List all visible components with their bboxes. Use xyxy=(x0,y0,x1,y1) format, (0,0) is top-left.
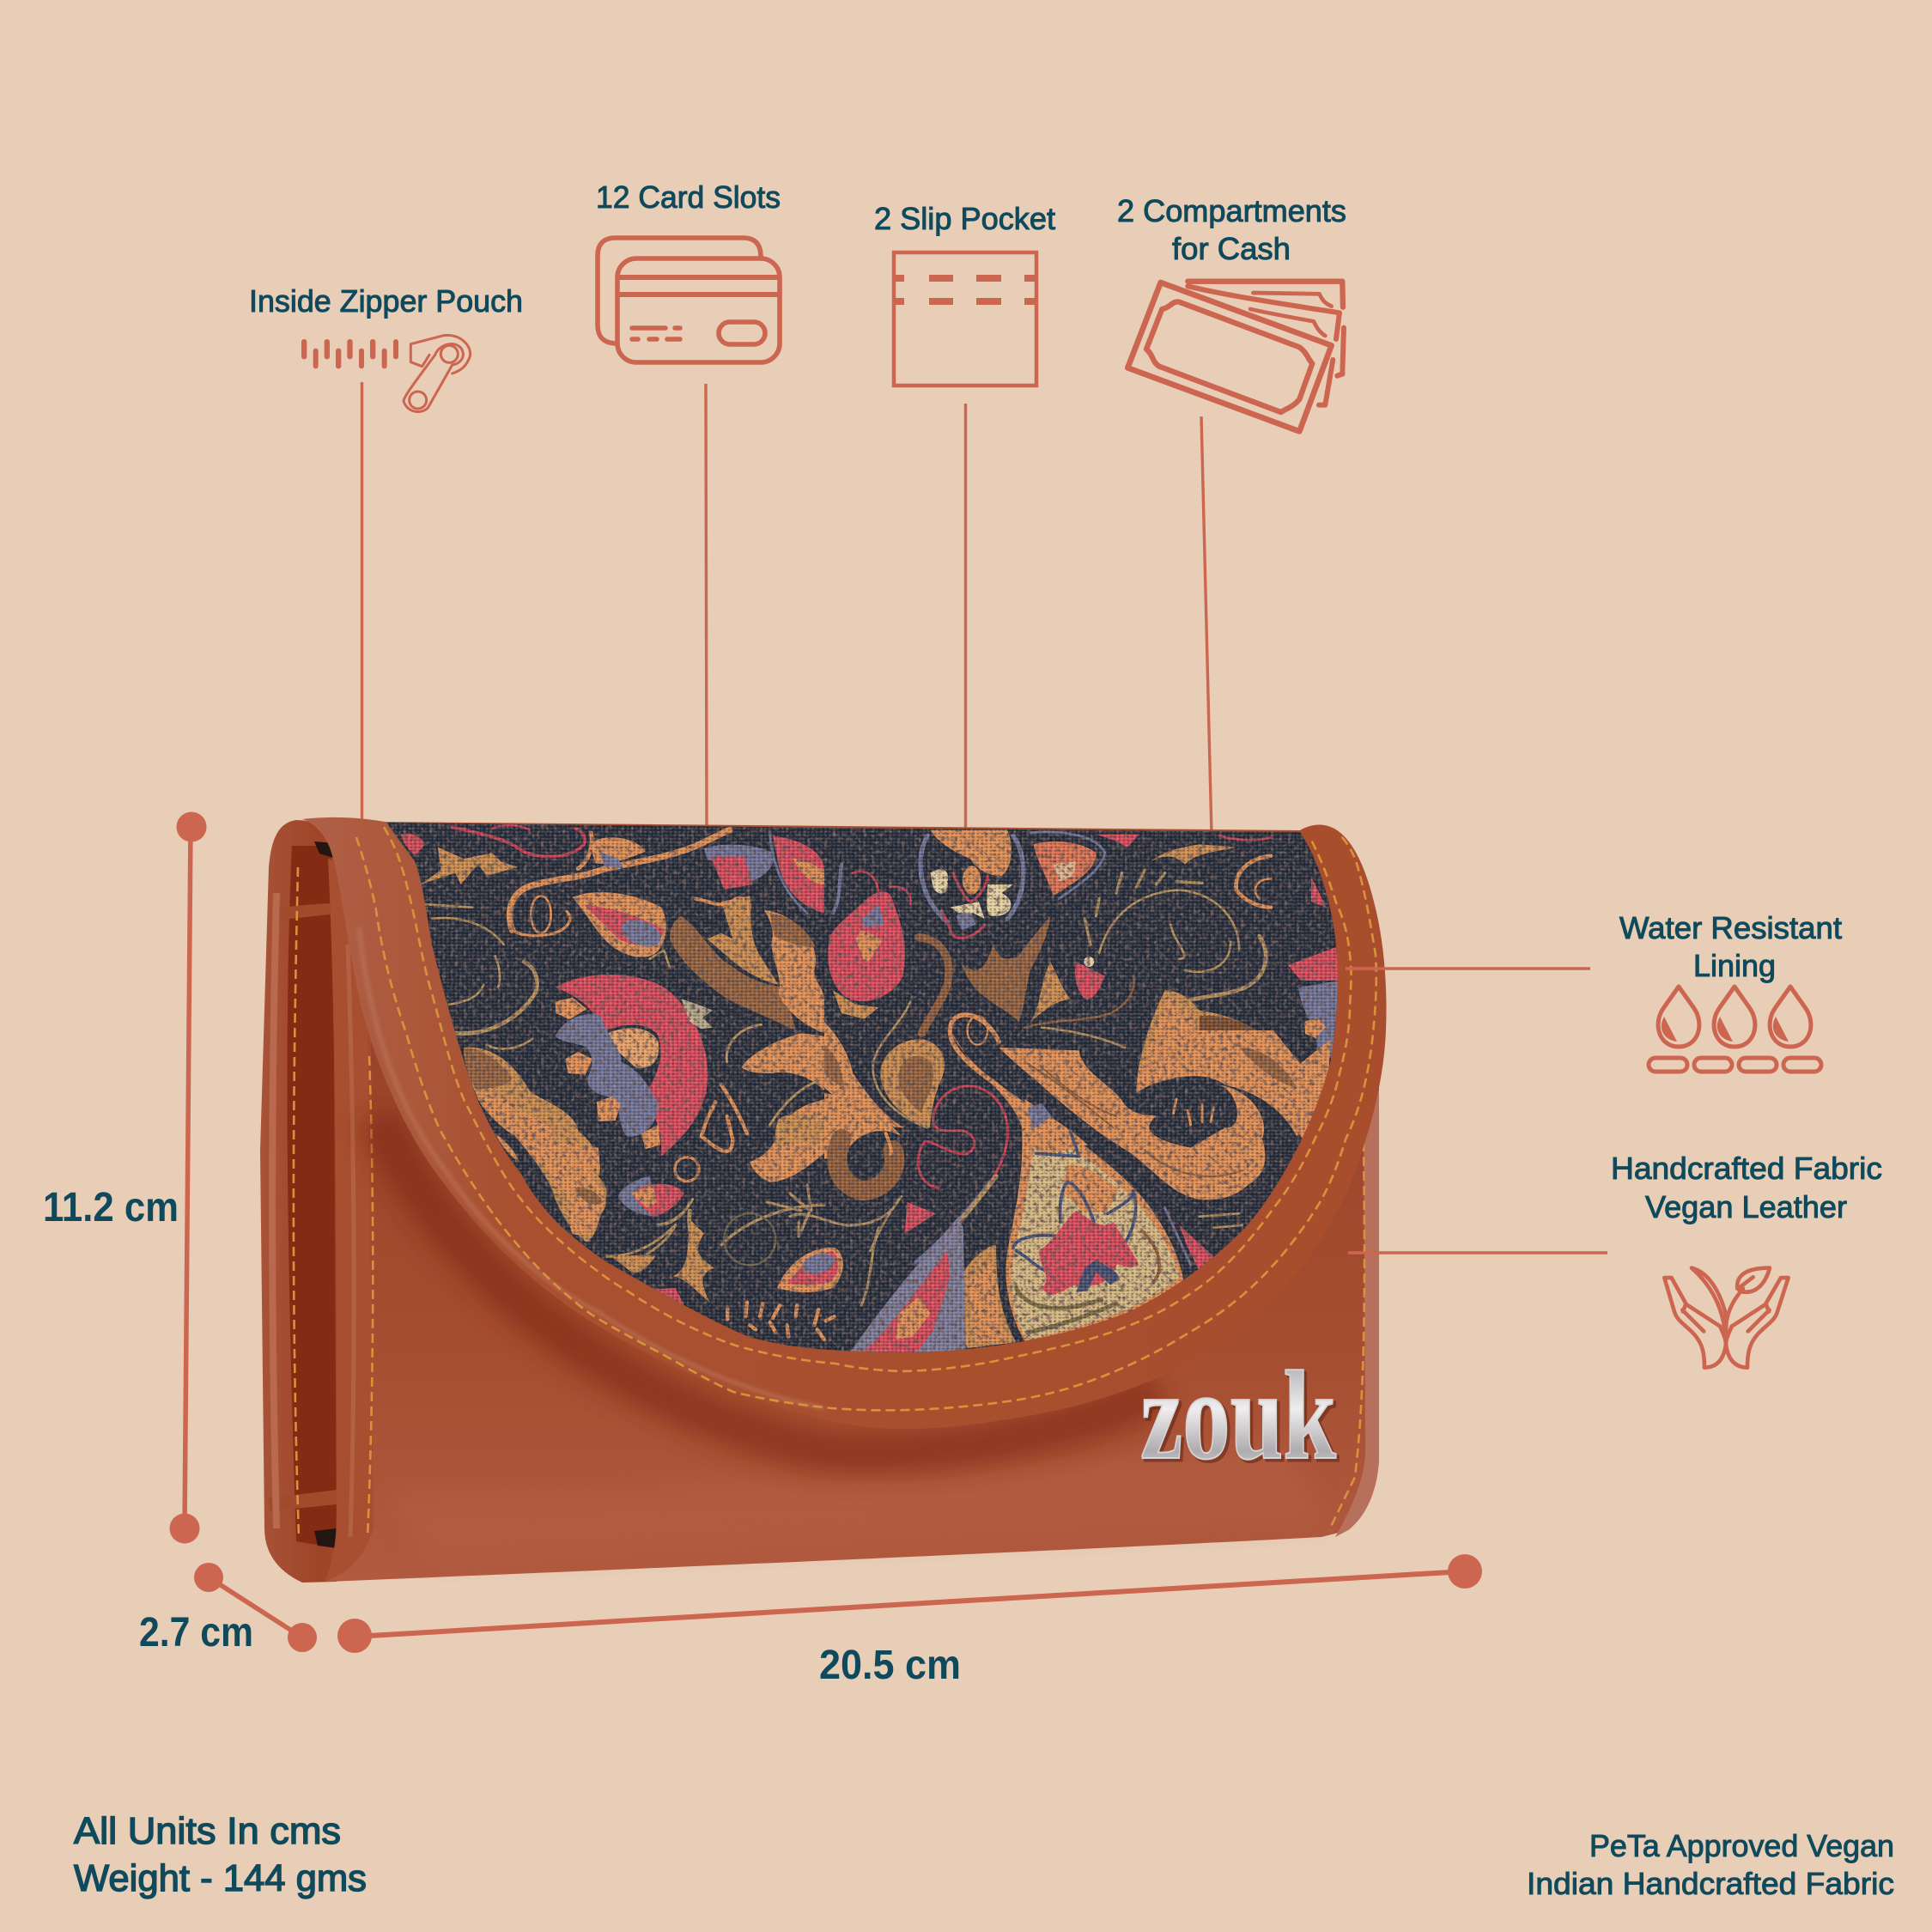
wallet spine xyxy=(260,820,378,1583)
callout: handcrafted fabric vegan leather xyxy=(1611,1151,1882,1368)
fabric panel xyxy=(369,807,1357,1365)
callout: compartments for cash: 2 Compartments xyxy=(1117,193,1346,228)
fabric motifs: right edge xyxy=(1288,877,1338,1139)
dimension: width 20.5 cm: 20.5 cm xyxy=(819,1643,961,1688)
fabric motifs: upper left xyxy=(401,825,824,1262)
right edge strip xyxy=(1335,1091,1379,1537)
flap stitching xyxy=(356,827,1376,1410)
note: units and weight: Weight - 144 gms xyxy=(74,1857,367,1899)
dimension: height 11.2 cm: 11.2 cm xyxy=(43,1185,179,1230)
zouk metal logo: zouk xyxy=(1140,1346,1337,1486)
note: certifications: PeTa Approved Vegan xyxy=(1589,1828,1894,1863)
fabric mottling xyxy=(369,807,1357,1365)
flap leather band xyxy=(302,817,1386,1429)
callout: compartments for cash xyxy=(1117,193,1346,431)
icon: zipper xyxy=(301,335,471,412)
callout: handcrafted fabric vegan leather: Vegan Leather xyxy=(1645,1189,1847,1224)
dimension: height 11.2 cm xyxy=(43,812,206,1544)
note: units and weight: All Units In cms xyxy=(74,1810,341,1852)
zouk metal logo: zouk xyxy=(1143,1348,1340,1489)
note: certifications: Indian Handcrafted Fabric xyxy=(1527,1866,1894,1901)
note: certifications xyxy=(1527,1828,1894,1901)
dimension: depth 2.7 cm xyxy=(139,1563,317,1656)
callout: inside zipper pouch xyxy=(249,283,523,412)
callout: water resistant lining: Water Resistant xyxy=(1619,910,1842,945)
callout: card slots xyxy=(596,179,781,362)
callout: water resistant lining xyxy=(1619,910,1842,1072)
fabric weave texture xyxy=(369,807,1357,1365)
lower panel highlight xyxy=(386,1443,1322,1558)
callout: slip pocket xyxy=(874,201,1055,386)
icon: pocket xyxy=(893,252,1037,386)
fabric motifs: large paisley xyxy=(939,1030,1320,1348)
callout: inside zipper pouch: Inside Zipper Pouch xyxy=(249,283,523,319)
callout: slip pocket: 2 Slip Pocket xyxy=(874,201,1055,236)
icon: hands with leaf xyxy=(1664,1268,1789,1368)
icon: banknotes xyxy=(1127,282,1344,431)
leader lines to top features xyxy=(362,382,1212,835)
fabric motifs: lower centre xyxy=(550,1142,966,1354)
wallet front panel xyxy=(326,1013,1379,1582)
flap shadow xyxy=(378,1116,1159,1453)
front fold strip xyxy=(325,859,374,1582)
callout: card slots: 12 Card Slots xyxy=(596,179,781,215)
dimension: width 20.5 cm xyxy=(337,1554,1482,1688)
fabric motifs: upper right xyxy=(824,830,1271,1262)
icon: credit cards xyxy=(598,238,780,362)
callout: water resistant lining: Lining xyxy=(1693,948,1776,983)
callout: handcrafted fabric vegan leather: Handcrafted Fabric xyxy=(1611,1151,1882,1186)
flap piping xyxy=(359,927,824,1408)
callout: compartments for cash: for Cash xyxy=(1172,231,1291,266)
dimension: depth 2.7 cm: 2.7 cm xyxy=(139,1610,253,1656)
leader lines to side features xyxy=(1346,969,1607,1253)
icon: water drops xyxy=(1649,987,1821,1072)
paisley wedge xyxy=(850,1217,966,1354)
spine inner gusset xyxy=(288,846,337,1548)
note: units and weight xyxy=(74,1810,367,1899)
wallet product photo xyxy=(260,807,1386,1583)
